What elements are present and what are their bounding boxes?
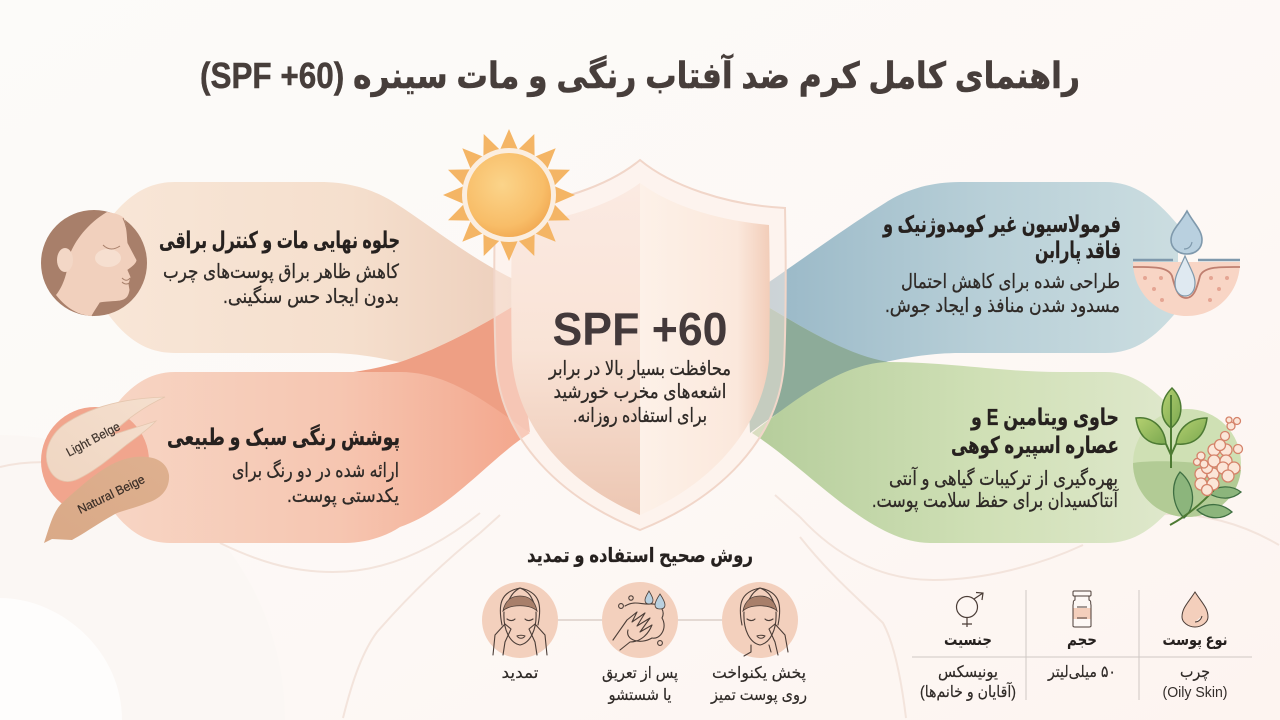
heading: skin type: نوع پوست	[1162, 632, 1228, 650]
icon: face profile	[41, 210, 147, 316]
heading: natural coverage: پوشش رنگی سبک و طبیعی	[167, 424, 400, 451]
text: coverage description line 1: ارائه شده در دو رنگ برای	[232, 459, 399, 482]
branch: lower sprig	[1170, 472, 1241, 525]
heading: gender: جنسیت	[944, 632, 992, 649]
icon: foundation swatches	[41, 397, 169, 543]
text: vitamin E description line 1: بهره‌گیری از ترکیبات گیاهی و آنتی	[889, 466, 1118, 490]
label: step 3: تمدید	[502, 665, 538, 682]
shield right half	[640, 183, 770, 515]
step icon: apply evenly	[722, 582, 798, 658]
shield outer glass	[494, 160, 786, 530]
label: step 1 line 1: پخش یکنواخت	[712, 665, 806, 683]
text: vitamin E description line 2: آنتاکسیدان برای حفظ سلامت پوست.	[872, 488, 1119, 512]
shield left half	[511, 183, 640, 515]
icon: shield	[494, 160, 786, 530]
text: protection line 1: محافظت بسیار بالا در برابر	[548, 358, 731, 380]
heading: volume: حجم	[1067, 632, 1097, 649]
title: راهنمای کامل کرم ضد آفتاب رنگی و مات سینره (SPF +60)	[200, 53, 1080, 97]
text: non-comedogenic description line 2: مسدود شدن منافذ و ایجاد جوش.	[885, 295, 1120, 317]
icon: water drop on skin	[1133, 211, 1240, 316]
icon: unisex symbol	[956, 592, 983, 627]
ribbon: salmon overlap	[345, 305, 530, 432]
flowers: spiraea	[1194, 417, 1242, 496]
heading: non-comedogenic line 2: فاقد پارابن	[1035, 237, 1121, 264]
icon: plant and spiraea	[1133, 388, 1242, 525]
swatch: natural beige	[44, 457, 169, 543]
background soft ring	[0, 435, 285, 720]
leaves: upper sprig	[1136, 388, 1207, 468]
value: volume: ۵۰ میلی‌لیتر	[1047, 664, 1116, 682]
background soft circle	[0, 598, 122, 720]
background curves	[0, 462, 1279, 718]
label: step 1 line 2: روی پوست تمیز	[710, 687, 807, 705]
value: skin type line 2: (Oily Skin)	[1162, 685, 1228, 701]
heading: how to use: روش صحیح استفاده و تمدید	[527, 545, 753, 567]
section: how to use	[482, 545, 807, 705]
heading: vitamin E line 2: عصاره اسپیره کوهی	[951, 432, 1119, 459]
step icon: after sweating	[602, 582, 678, 658]
step icon: reapply	[482, 582, 558, 658]
text: protection line 3: برای استفاده روزانه.	[573, 405, 707, 427]
panel: non-comedogenic	[765, 182, 1178, 362]
table: product specs	[912, 590, 1252, 702]
label: Natural Beige: Natural Beige	[75, 472, 147, 517]
heading: non-comedogenic line 1: فرمولاسیون غیر کومدوژنیک و	[882, 211, 1121, 238]
panel: natural coverage	[105, 372, 530, 543]
text: coverage description line 2: یکدستی پوست.	[287, 485, 399, 507]
panel shape: peach	[105, 182, 515, 362]
value: gender line 1: یونیسکس	[938, 664, 998, 682]
panel shape: blue	[765, 182, 1178, 362]
heading: vitamin E line 1: حاوی ویتامین E و	[970, 404, 1119, 431]
label: Light Belge: Light Belge	[64, 419, 122, 459]
ribbon: green overlap	[745, 305, 888, 433]
heading: matte finish: جلوه نهایی مات و کنترل براقی	[159, 227, 400, 254]
panel shape: salmon	[105, 372, 530, 543]
icon: sun	[443, 129, 575, 261]
icon: bottle	[1073, 591, 1091, 627]
text: non-comedogenic description line 1: طراحی شده برای کاهش احتمال	[901, 271, 1120, 293]
value: gender line 2: (آقایان و خانم‌ها)	[920, 682, 1016, 702]
text: protection line 2: اشعه‌های مخرب خورشید	[554, 381, 726, 403]
swatch: light beige	[46, 397, 165, 481]
label: step 2 line 2: یا شستشو	[608, 687, 672, 705]
panel: matte finish	[105, 182, 515, 362]
text: matte description line 2: بدون ایجاد حس سنگینی.	[223, 285, 399, 308]
text: matte description line 1: کاهش ظاهر براق پوست‌های چرب	[163, 261, 400, 283]
label: step 2 line 1: پس از تعریق	[602, 665, 678, 683]
heading: SPF +60: SPF +60	[552, 303, 728, 355]
panel: vitamin E	[752, 362, 1178, 543]
icon: skin drop	[1182, 592, 1208, 627]
value: skin type line 1: چرب	[1180, 664, 1210, 682]
panel shape: green	[752, 362, 1178, 543]
